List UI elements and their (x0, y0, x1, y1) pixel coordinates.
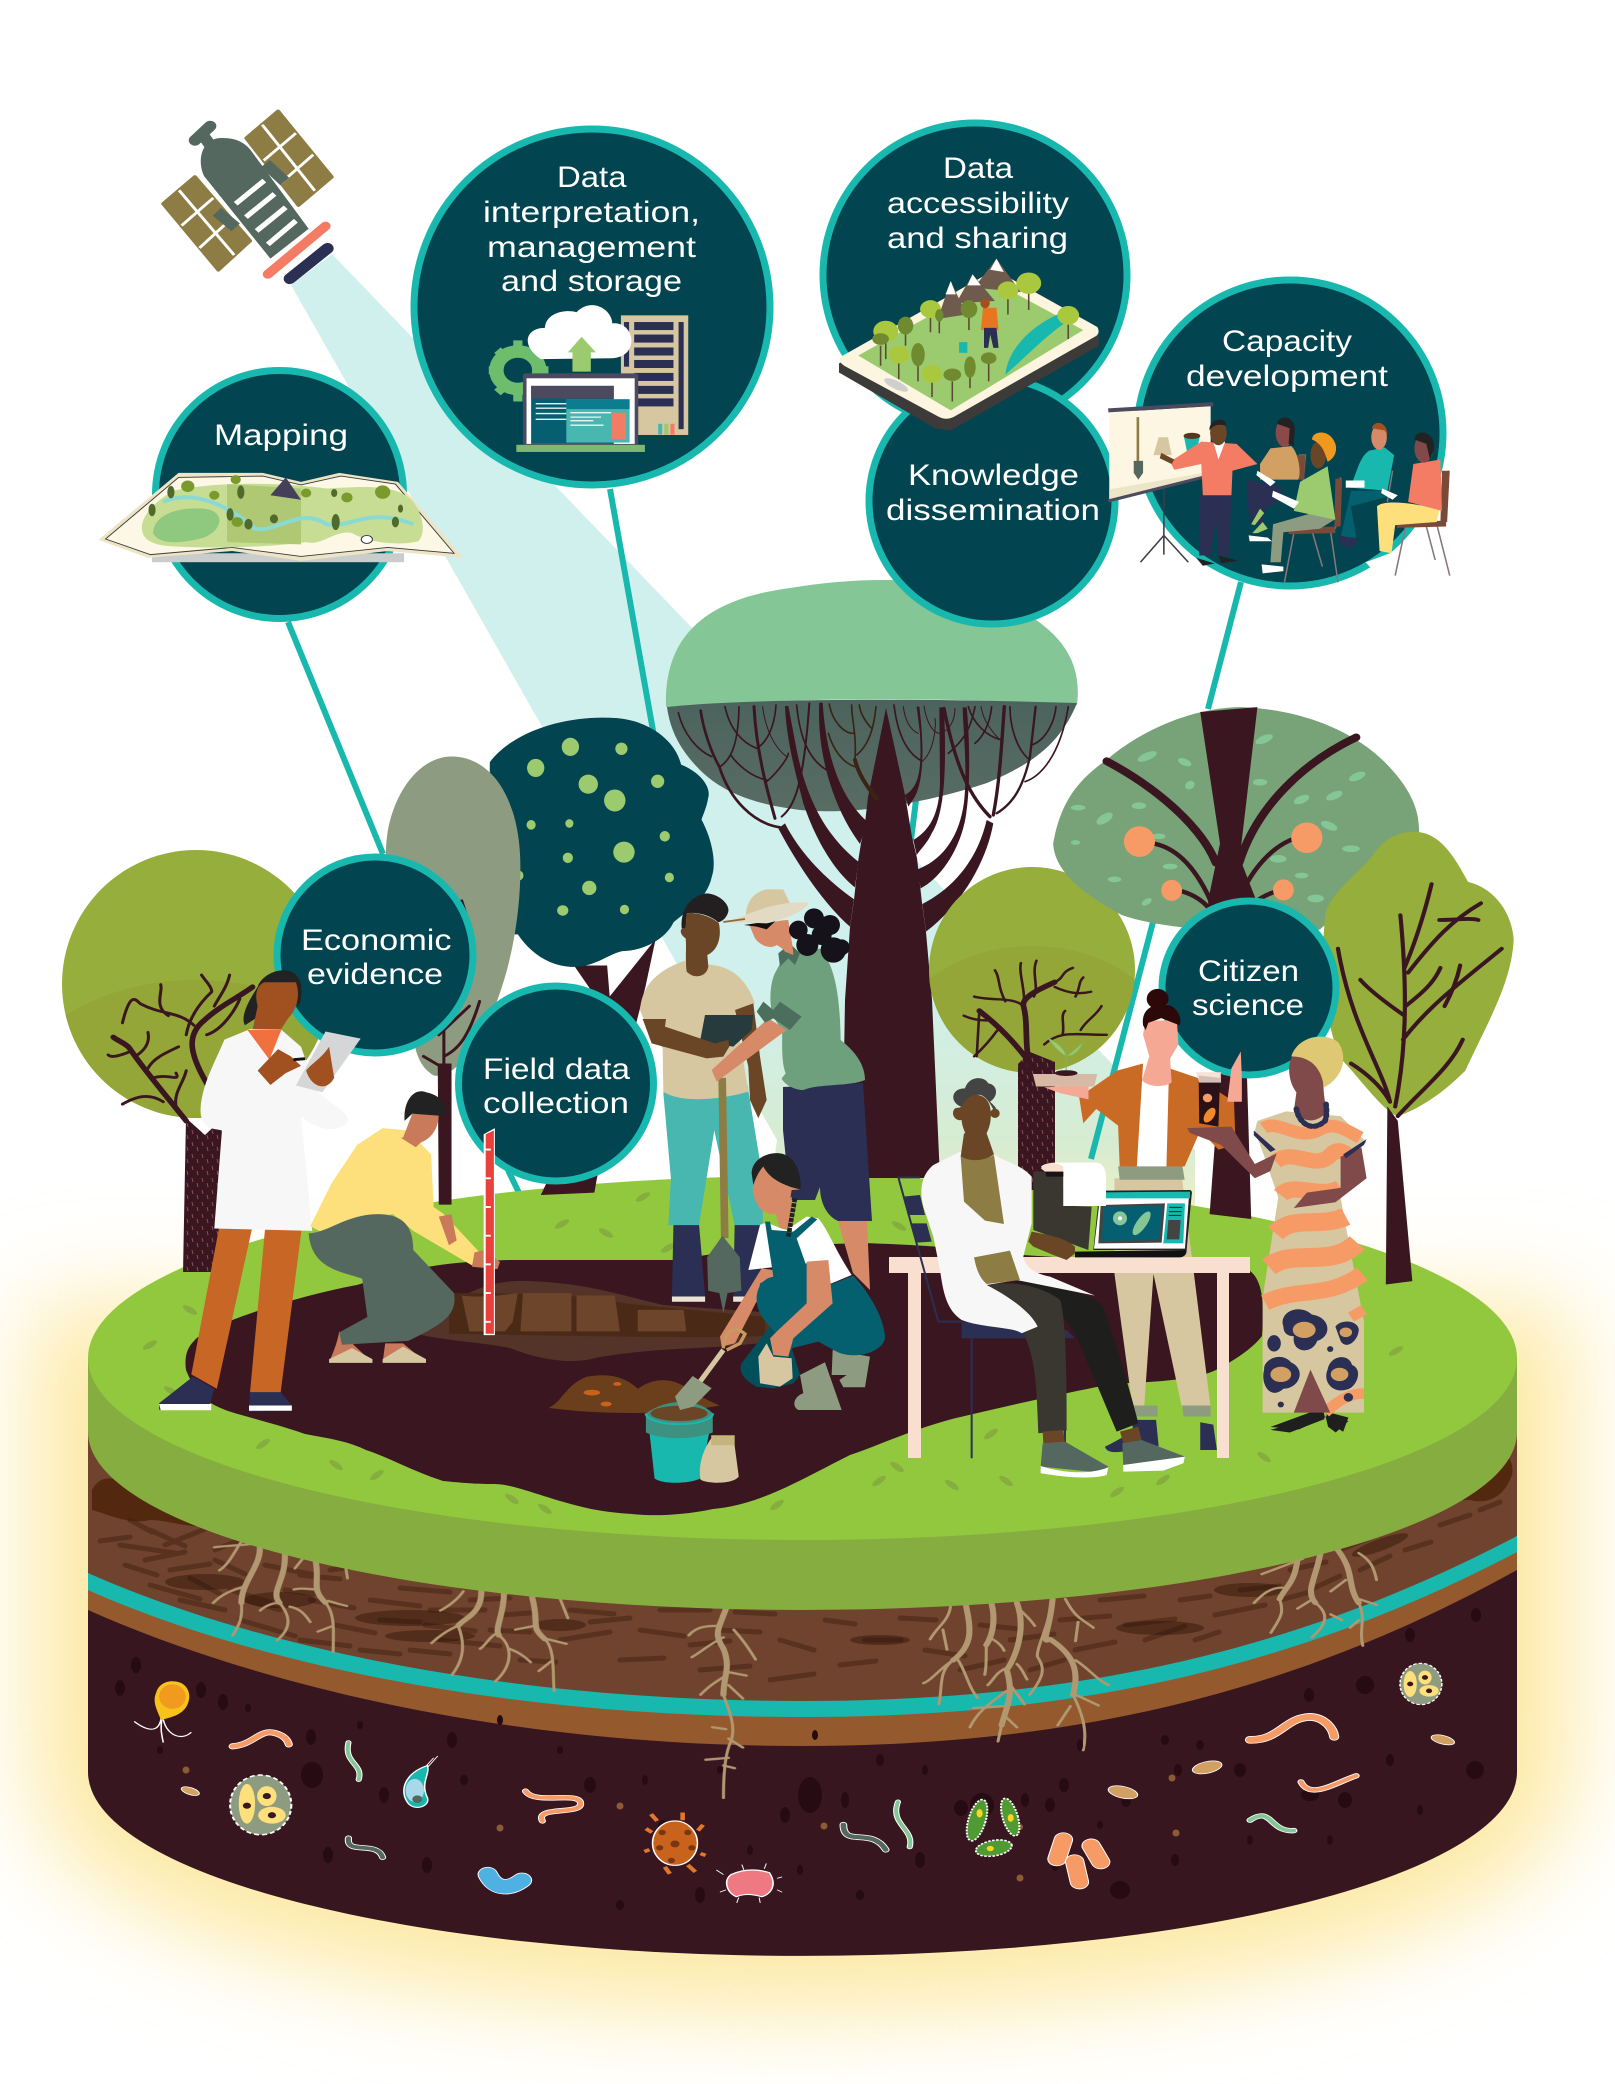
necklace (1296, 1104, 1327, 1126)
head (401, 1114, 439, 1147)
shoes (159, 1377, 214, 1410)
topsoil layer (88, 1360, 1517, 1701)
green turf top (88, 1176, 1517, 1540)
solar panel lower (163, 177, 250, 270)
person: woman in patterned dress (1187, 1037, 1367, 1432)
head (1289, 1051, 1328, 1120)
fruit dots (515, 738, 674, 916)
green worm (348, 1743, 359, 1780)
person: kneeling girl in teal overalls (720, 1153, 885, 1410)
solar panel upper (246, 111, 332, 205)
dark worm (843, 1825, 886, 1850)
person: kneeling man in yellow (309, 1091, 500, 1363)
small seed (180, 1785, 201, 1797)
connector lines (288, 489, 1241, 1195)
training scene (1108, 404, 1450, 582)
circle: data interpretation: management (487, 231, 697, 264)
table top (889, 1257, 1250, 1273)
hands (439, 1214, 457, 1245)
branches (1107, 737, 1356, 910)
seated person a (1247, 418, 1300, 533)
legs (838, 1221, 870, 1290)
trunk (183, 1115, 226, 1272)
neck and head (961, 1133, 994, 1160)
canopy (490, 718, 714, 967)
flagellate (134, 1681, 191, 1743)
person: seated scientist (898, 1078, 1192, 1478)
canopy underside (667, 700, 1077, 811)
sleeve block (1033, 1172, 1092, 1250)
shoes (1270, 1408, 1348, 1432)
chairs (1284, 455, 1450, 582)
belt (1118, 1164, 1185, 1180)
data accessibility label and tablet: and sharing (887, 222, 1068, 255)
satellite beam (291, 254, 1195, 1260)
orange ringed worm (526, 1791, 581, 1821)
trousers lower (663, 1085, 763, 1225)
shirt (247, 1029, 282, 1060)
roots (213, 1542, 1377, 1798)
person: woman in lab coat with tablet (159, 970, 361, 1412)
circle: economic evidence: Economic (301, 924, 452, 957)
circle: field data collection (458, 986, 654, 1181)
shoes (1041, 1440, 1185, 1473)
presenter (1160, 420, 1257, 566)
trunk (541, 939, 656, 1195)
dark worm (348, 1838, 383, 1857)
tree: grey-green narrow (386, 756, 520, 1205)
circle: capacity development (1108, 280, 1450, 586)
hair (244, 970, 301, 1025)
glow behind soil disc (88, 1358, 1517, 1956)
desk and laptop (889, 1257, 1250, 1458)
hat (746, 889, 790, 922)
near leg (987, 1283, 1067, 1433)
circle: field data collection: collection (483, 1087, 629, 1120)
green turf side (88, 1358, 1517, 1610)
seated person b (1249, 432, 1336, 573)
circle: knowledge dissemination: Knowledge (908, 459, 1079, 492)
back arm (720, 1268, 774, 1347)
blue bacterium (488, 1875, 522, 1887)
pink microbe (716, 1863, 782, 1903)
icon: tablet with landscape (839, 259, 1099, 431)
face (753, 1167, 801, 1214)
dress flowers (1263, 1309, 1359, 1407)
upper body (640, 893, 767, 1118)
leaves on turf (142, 1190, 1404, 1516)
arms (1187, 1127, 1277, 1178)
front arm (770, 1260, 833, 1357)
shovel (707, 1078, 741, 1313)
dress (1255, 1111, 1367, 1413)
collar (778, 943, 800, 967)
seated person d (1366, 433, 1442, 569)
person: man in beige shirt (640, 893, 767, 1302)
circle: mapping (98, 370, 463, 618)
data accessibility label and tablet: accessibility (887, 187, 1069, 220)
branches (108, 975, 253, 1121)
subsoil specks (115, 1608, 1484, 1910)
circle: citizen science: science (1192, 989, 1304, 1022)
digging figure (959, 298, 999, 353)
cuff (757, 1002, 802, 1030)
arm (712, 1018, 787, 1082)
shirt (748, 1217, 852, 1284)
orange virus (644, 1813, 706, 1874)
ankles (1043, 1427, 1142, 1443)
satellite (163, 111, 332, 279)
circle: field data collection: Field data (483, 1053, 630, 1086)
rod bacteria (1046, 1831, 1113, 1890)
tree: olive left (62, 850, 318, 1272)
circle: economic evidence (277, 857, 473, 1053)
mound of soil (548, 1375, 719, 1413)
shirt (1137, 1080, 1170, 1166)
right branches (828, 704, 1068, 932)
circle: citizen science: Citizen (1198, 955, 1299, 988)
shoes of dress wearer (1270, 1415, 1348, 1433)
inner shirt (961, 1155, 1020, 1284)
text: Data (557, 161, 627, 194)
shoes (329, 1331, 426, 1362)
leaves (1071, 732, 1367, 907)
hand (1028, 1232, 1075, 1260)
trowel (675, 1330, 745, 1410)
topsoil texture (92, 1450, 1513, 1680)
orange worm 2 (1250, 1717, 1334, 1740)
left branches (678, 703, 867, 927)
back shoe (1105, 1422, 1158, 1452)
circle: capacity development: development (1186, 360, 1389, 393)
body (201, 138, 309, 259)
overall trousers (741, 1263, 885, 1388)
circle: data interpretation: and storage (501, 265, 682, 298)
circle: knowledge dissemination: dissemination (886, 494, 1100, 527)
icon: folded map (98, 473, 463, 562)
fruits (1124, 822, 1322, 901)
spiky cyst (230, 1775, 291, 1835)
orange-brown layer (88, 1360, 1517, 1746)
green worm 2 (1250, 1816, 1294, 1831)
tablet (296, 1031, 361, 1092)
spiky cyst (1400, 1663, 1442, 1705)
antenna (195, 126, 213, 149)
sample jar (1196, 1072, 1221, 1127)
person: woman in hat and green shirt (712, 889, 872, 1290)
circle: data interpretation (414, 129, 770, 485)
microorganisms right (843, 1663, 1456, 1890)
back boot (832, 1350, 870, 1387)
navy bar (290, 248, 328, 279)
neck (775, 1197, 793, 1230)
white block (1041, 1163, 1106, 1206)
salmon bar (268, 226, 326, 274)
trousers (191, 1226, 302, 1393)
circle: capacity development: Capacity (1222, 325, 1352, 358)
table legs (908, 1273, 1229, 1458)
microorganisms left (134, 1681, 782, 1903)
circle: data interpretation: interpretation, (483, 196, 700, 229)
circle: citizen science (1162, 901, 1336, 1075)
branches (964, 961, 1107, 1068)
seedling tray (1033, 1039, 1097, 1086)
chair (898, 1177, 1075, 1458)
hair (752, 1153, 801, 1189)
soil pit (408, 1281, 776, 1413)
orange worm 3 (1301, 1776, 1356, 1790)
teal water layer (88, 1360, 1517, 1717)
measuring stick (484, 1128, 495, 1335)
trunk (842, 708, 940, 1178)
front boot (794, 1362, 842, 1410)
coat (201, 1029, 348, 1231)
circle: knowledge dissemination (869, 378, 1115, 624)
tree: olive right tall (1322, 832, 1514, 1284)
circle: economic evidence: evidence (307, 958, 443, 991)
trunk (1200, 707, 1257, 1219)
teal protozoan (404, 1756, 438, 1807)
tree: olive right small (929, 867, 1135, 1190)
canopy (1053, 707, 1419, 931)
bag (758, 1343, 793, 1387)
face (749, 920, 793, 955)
projector screen (1108, 404, 1213, 562)
seeds (1106, 1733, 1456, 1801)
far leg (1010, 1280, 1138, 1432)
brown shadow branch (828, 704, 877, 798)
person: standing woman with orange jacket (1033, 989, 1242, 1450)
jacket (1079, 1064, 1236, 1166)
head (253, 982, 298, 1030)
trunk (1018, 1052, 1055, 1190)
data accessibility label and tablet: Data (943, 152, 1013, 185)
bucket and bag (646, 1402, 739, 1483)
hand with tray (1044, 1085, 1088, 1099)
body stripes (236, 181, 296, 244)
trousers (1114, 1178, 1211, 1408)
green worm (896, 1802, 910, 1847)
tree: orange fruit (1053, 707, 1419, 1219)
icon: cloud, server, gear, laptop (489, 305, 688, 452)
head (1142, 1020, 1178, 1086)
white coat (921, 1152, 1095, 1333)
shoes (1107, 1420, 1217, 1450)
canopy top (666, 580, 1078, 707)
shorts (783, 1083, 872, 1221)
circle: mapping: Mapping (214, 419, 348, 452)
soil patch on top of disc (185, 1243, 1263, 1515)
soil disc cross-section (88, 1176, 1517, 1956)
orange worm 1 (233, 1732, 289, 1746)
seated person c (1340, 423, 1394, 547)
green paramecia (963, 1797, 1023, 1859)
laptop (1075, 1190, 1192, 1257)
bib (757, 1217, 817, 1333)
arms and hands (258, 1049, 301, 1085)
subsoil layer (88, 1358, 1517, 1956)
hair (953, 1078, 996, 1109)
data accessibility label and tablet (839, 152, 1099, 431)
tree: dark teal with dots (490, 718, 714, 1195)
dress waves (1264, 1126, 1364, 1413)
shirt (310, 1128, 480, 1265)
curly hair (789, 908, 850, 963)
tree: big umbrella (666, 580, 1078, 1178)
boots (663, 1085, 763, 1302)
hand (1227, 1052, 1242, 1102)
struts (217, 164, 285, 227)
trousers (309, 1214, 455, 1345)
shirt (770, 945, 865, 1090)
circle: data accessibility (823, 123, 1127, 427)
